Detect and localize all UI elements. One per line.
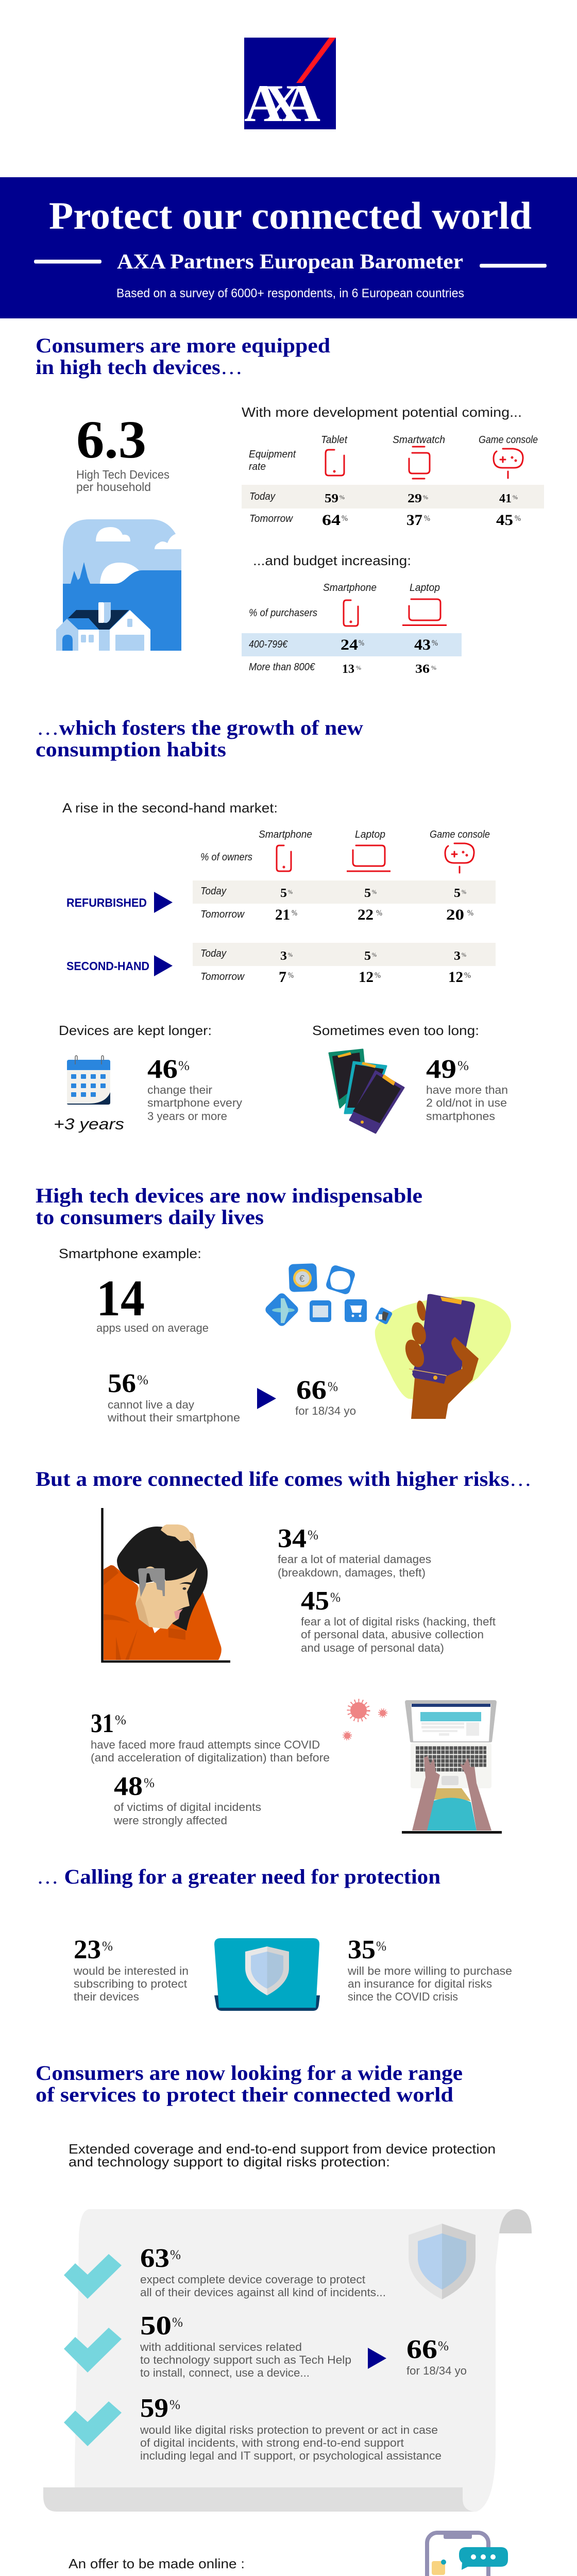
illustration: worried woman [102,1508,230,1662]
intro text: and technology support to digital risks protection: [69,2154,390,2170]
table: budget: % [359,639,364,648]
heading: indispensable devices: to consumers daily lives [36,1206,264,1229]
illustration: laptop and hands [402,1700,502,1834]
row group: second-hand: 3 [280,950,287,963]
heading: greater need for protection: … Calling for a greater need for protection [37,1865,440,1888]
row group: refurbished: % [292,909,297,918]
stat: 59% [140,2394,442,2462]
icon: game console [494,449,523,478]
table: equipment rate: % [340,494,345,501]
title: Protect our connected world [49,195,532,238]
stat: 63%: % [170,2247,181,2262]
stat: 6.3 devices: per household [76,480,151,494]
stat: 66% young adults: for 18/34 yo [406,2364,467,2377]
row group: refurbished: Tomorrow [200,909,245,920]
table: budget: 400-799€ [249,639,288,650]
icon: smartphone [277,845,291,871]
heading: consumers more equipped: Consumers are more equipped [36,334,330,357]
table: budget [242,553,462,676]
table: budget: 43 [414,636,431,653]
stat: 45%: 45 [301,1586,329,1616]
stat: 49%: smartphones [426,1110,495,1123]
table: second-hand market [62,800,496,986]
panel: devices kept longer [54,1023,242,1133]
row group: refurbished: 21 [275,906,290,923]
stat: 66%: 66 [296,1376,327,1405]
row group: refurbished: REFURBISHED [66,896,147,909]
intro text [69,2141,496,2170]
illustration: old phones [329,1049,404,1133]
row group: second-hand: % [288,971,294,980]
stat: 56%: cannot live a day [108,1398,194,1411]
stat: 59%: % [169,2397,180,2412]
row group: refurbished: % [376,909,382,918]
table: budget: % [431,664,436,671]
table: budget: 24 [341,636,358,653]
stat: 35%: will be more willing to purchase [347,1964,512,1977]
stat: 34%: fear a lot of material damages [278,1553,431,1566]
stat: 34%: % [308,1528,318,1543]
panel: offer online: An offer to be made online : [69,2556,245,2571]
stat: 35%: % [376,1939,386,1954]
panel: devices kept longer: Devices are kept longer: [59,1023,212,1038]
stat: 59%: including legal and IT support, or psychological assistance [140,2449,442,2462]
stat: 48%: were strongly affected [113,1814,227,1827]
stat: 59%: 59 [140,2394,168,2423]
row group: second-hand: 7 [279,969,286,986]
heading: higher risks: But a more connected life comes with higher risks … [36,1467,532,1490]
arrow [257,1388,276,1409]
table: equipment rate: 45 [496,512,513,529]
icon: check 3 [64,2401,122,2446]
icon: smartwatch [409,447,430,479]
stat: 63% [140,2244,386,2299]
stat: 48%: 48 [114,1772,143,1801]
stat: 45%: % [330,1590,341,1605]
stat: 35%: an insurance for digital risks [348,1977,492,1990]
row group: second-hand: Tomorrow [200,971,245,982]
stat: 49% [426,1055,508,1123]
row group: second-hand: % [375,971,381,980]
table: second-hand market: Laptop [355,829,385,840]
panel: offer online [69,2533,508,2576]
table: budget: % [356,664,361,671]
stat: 46% [147,1055,242,1123]
panel: smartphone example [59,1246,511,1424]
panel: scroll with services [43,2209,532,2512]
illustration: shield on laptop [214,1938,320,2011]
stat: 45% [301,1586,496,1654]
intro text: Extended coverage and end-to-end support from device protection [69,2141,496,2157]
table: equipment rate: % [424,514,430,523]
heading: indispensable devices: High tech devices are now indispensable [36,1184,422,1207]
row group: refurbished: % [288,888,293,895]
stat: 49%: 2 old/not in use [426,1096,507,1109]
stat: 23%: would be interested in [73,1964,189,1977]
stat: 63%: all of their devices against all kind of incidents... [140,2286,386,2299]
stat: 34% [278,1524,431,1579]
illustration: app icons [264,1263,393,1328]
row group: refurbished: % [467,909,473,918]
subtitle: AXA Partners European Barometer [117,249,463,273]
heading: indispensable devices [36,1184,422,1229]
row group: refurbished: 5 [454,887,461,900]
table: equipment rate: Smartwatch [393,434,445,446]
stat: 46%: smartphone every [147,1096,242,1109]
table: equipment rate: rate [249,461,266,472]
subheading: ...and budget increasing: [253,553,411,568]
stat: 59%: of digital incidents, with strong end-to-end support [140,2436,404,2449]
stat: 50%: with additional services related [140,2341,302,2353]
heading: consumers more equipped [36,334,330,379]
stat: 45%: fear a lot of digital risks (hacking, theft [301,1615,496,1628]
table: equipment rate: % [513,494,518,501]
logo: AXA [244,38,336,133]
icon: tablet [326,450,344,476]
row group: refurbished: 5 [280,887,287,900]
table: equipment rate: Tablet [321,434,348,446]
stat: 23%: their devices [74,1990,139,2003]
heading: new consumption habits: …which fosters the growth of new [37,716,363,739]
stat: 49%: % [457,1058,469,1073]
stat: 14 apps: 14 [96,1269,145,1327]
table: second-hand market: Game console [430,829,490,840]
stat: 63%: expect complete device coverage to protect [140,2273,365,2286]
row group: second-hand: 12 [359,969,374,986]
table: equipment rate: 59 [325,492,338,505]
stat: 66%: for 18/34 yo [295,1404,356,1417]
stat: 35%: 35 [348,1935,376,1964]
table: equipment rate [242,404,544,529]
stat: 50%: % [172,2315,183,2330]
stat: 6.3 devices: High Tech Devices [76,468,169,481]
table: equipment rate: % [515,514,521,523]
row group: second-hand: % [464,971,471,980]
illustration: house [56,519,182,651]
table: budget: Laptop [410,582,440,594]
icon: laptop [347,845,391,871]
stat: 56%: without their smartphone [107,1411,240,1424]
stat: 48%: of victims of digital incidents [114,1801,261,1814]
stat: 49%: have more than [426,1083,508,1096]
table: second-hand market: Smartphone [259,829,312,840]
stat: 31%: have faced more fraud attempts since COVID [91,1738,320,1751]
table: equipment rate: Today [249,491,276,502]
stat: 23%: subscribing to protect [74,1977,187,1990]
stat: 45%: and usage of personal data) [301,1641,444,1654]
arrow [368,2348,386,2369]
stat: 63%: 63 [140,2244,169,2273]
row group: refurbished [66,880,496,923]
subheading: With more development potential coming... [242,404,522,420]
stat: 56%: % [137,1372,148,1387]
row group: second-hand: % [288,951,293,958]
table: budget: % of purchasers [249,607,317,619]
stat: 31%: (and acceleration of digitalization) than before [91,1751,330,1764]
stat: 50%: to install, connect, use a device... [140,2366,310,2379]
heading: wide range of services: Consumers are now looking for a wide range [36,2061,463,2084]
heading: consumers more equipped: in high tech devices … [36,355,243,379]
stat: 50% [140,2311,351,2379]
icon: check 1 [64,2254,122,2299]
stat: 48% [113,1772,261,1827]
illustration: phone with advisor [427,2533,508,2576]
icon: shield [409,2224,476,2299]
row group: second-hand [66,943,496,986]
row group: second-hand: Today [200,948,227,959]
panel: sometimes too long: Sometimes even too long: [312,1023,479,1038]
subheading: A rise in the second-hand market: [62,800,278,816]
stat: 34%: 34 [278,1524,307,1553]
table: budget: 13 [342,663,354,676]
stat: 66% [295,1376,356,1417]
logo: AXA: AXA [244,74,320,133]
stat: 46%: 3 years or more [147,1110,227,1123]
stat: 46%: 46 [147,1055,178,1084]
table: budget: 36 [415,663,430,676]
stat: 50%: to technology support such as Tech Help [140,2353,351,2366]
panel: sometimes too long [312,1023,508,1133]
row group: refurbished: % [372,888,377,895]
stat: 66%: % [328,1379,338,1394]
survey note: Based on a survey of 6000+ respondents, in 6 European countries [116,286,464,300]
row group: refurbished: 22 [358,906,374,923]
table: equipment rate: Equipment [249,449,296,460]
stat: 59%: would like digital risks protection to prevent or act in case [140,2424,438,2436]
heading: wide range of services [36,2061,463,2106]
row group: second-hand: % [462,951,466,958]
stat: 46%: change their [147,1083,212,1096]
heading: wide range of services: of services to protect their connected world [36,2083,453,2106]
row group: refurbished: % [462,888,466,895]
header banner [0,177,577,318]
row group: refurbished: Today [200,886,227,897]
heading: new consumption habits: consumption habits [36,738,226,761]
row group: second-hand: 3 [454,950,461,963]
stat: 34%: (breakdown, damages, theft) [278,1566,426,1579]
stat: 56%: 56 [108,1369,136,1398]
label: +3 years: +3 years [54,1115,124,1133]
table: equipment rate: % [423,494,428,501]
icon: smartphone [344,600,358,626]
illustration: hand holding phone [375,1294,511,1419]
table: equipment rate: 64 [322,512,341,529]
stat: 23%: % [102,1939,113,1954]
stat: 35%: since the COVID crisis [348,1990,458,2003]
stat: 46%: % [178,1058,190,1073]
stat: 50%: 50 [140,2311,172,2341]
row group: second-hand: SECOND-HAND [66,959,149,973]
table: budget: More than 800€ [249,662,315,673]
row group: second-hand: % [372,951,377,958]
illustration: app icons: € [299,1274,304,1284]
icon: laptop [402,599,447,625]
stat: 14 apps: apps used on average [96,1321,209,1334]
stat: 23%: 23 [74,1935,101,1964]
stat: 66% young adults [406,2335,467,2377]
stat: 6.3 devices: 6.3 [76,410,146,469]
stat: 6.3 devices [76,410,169,494]
stat: 14 apps [96,1269,209,1334]
table: equipment rate: Game console [479,434,538,446]
stat: 48%: % [144,1775,155,1790]
heading: new consumption habits [36,716,363,761]
stat: 35% [347,1935,512,2003]
stat: 66% young adults: % [438,2338,449,2353]
table: budget: % [432,639,438,648]
table: equipment rate: Tomorrow [249,513,293,524]
row group: second-hand: 12 [448,969,463,986]
stat: 66% young adults: 66 [406,2335,437,2364]
table: equipment rate: 41 [499,492,512,505]
table: equipment rate: % [342,514,348,523]
icon: game console [445,843,474,873]
stat: 31%: % [115,1713,126,1727]
panel: smartphone example: Smartphone example: [59,1246,201,1261]
icon: calendar [67,1056,110,1105]
row group: refurbished: 5 [364,887,371,900]
row group: second-hand: 5 [364,950,371,963]
stat: 45%: of personal data, abusive collection [301,1628,484,1641]
stat: 49%: 49 [426,1055,456,1084]
table: second-hand market: % of owners [200,852,252,863]
stat: 31% [91,1709,330,1764]
stat: 23% [73,1935,189,2003]
stat: 56% [107,1369,240,1424]
stat: 31%: 31 [91,1709,114,1738]
table: budget: Smartphone [323,582,377,594]
icon: check 2 [64,2328,122,2372]
row group: refurbished: 20 [446,906,464,923]
illustration: virus particles [343,1701,386,1739]
table: equipment rate: 29 [408,492,422,505]
table: equipment rate: 37 [406,512,422,529]
